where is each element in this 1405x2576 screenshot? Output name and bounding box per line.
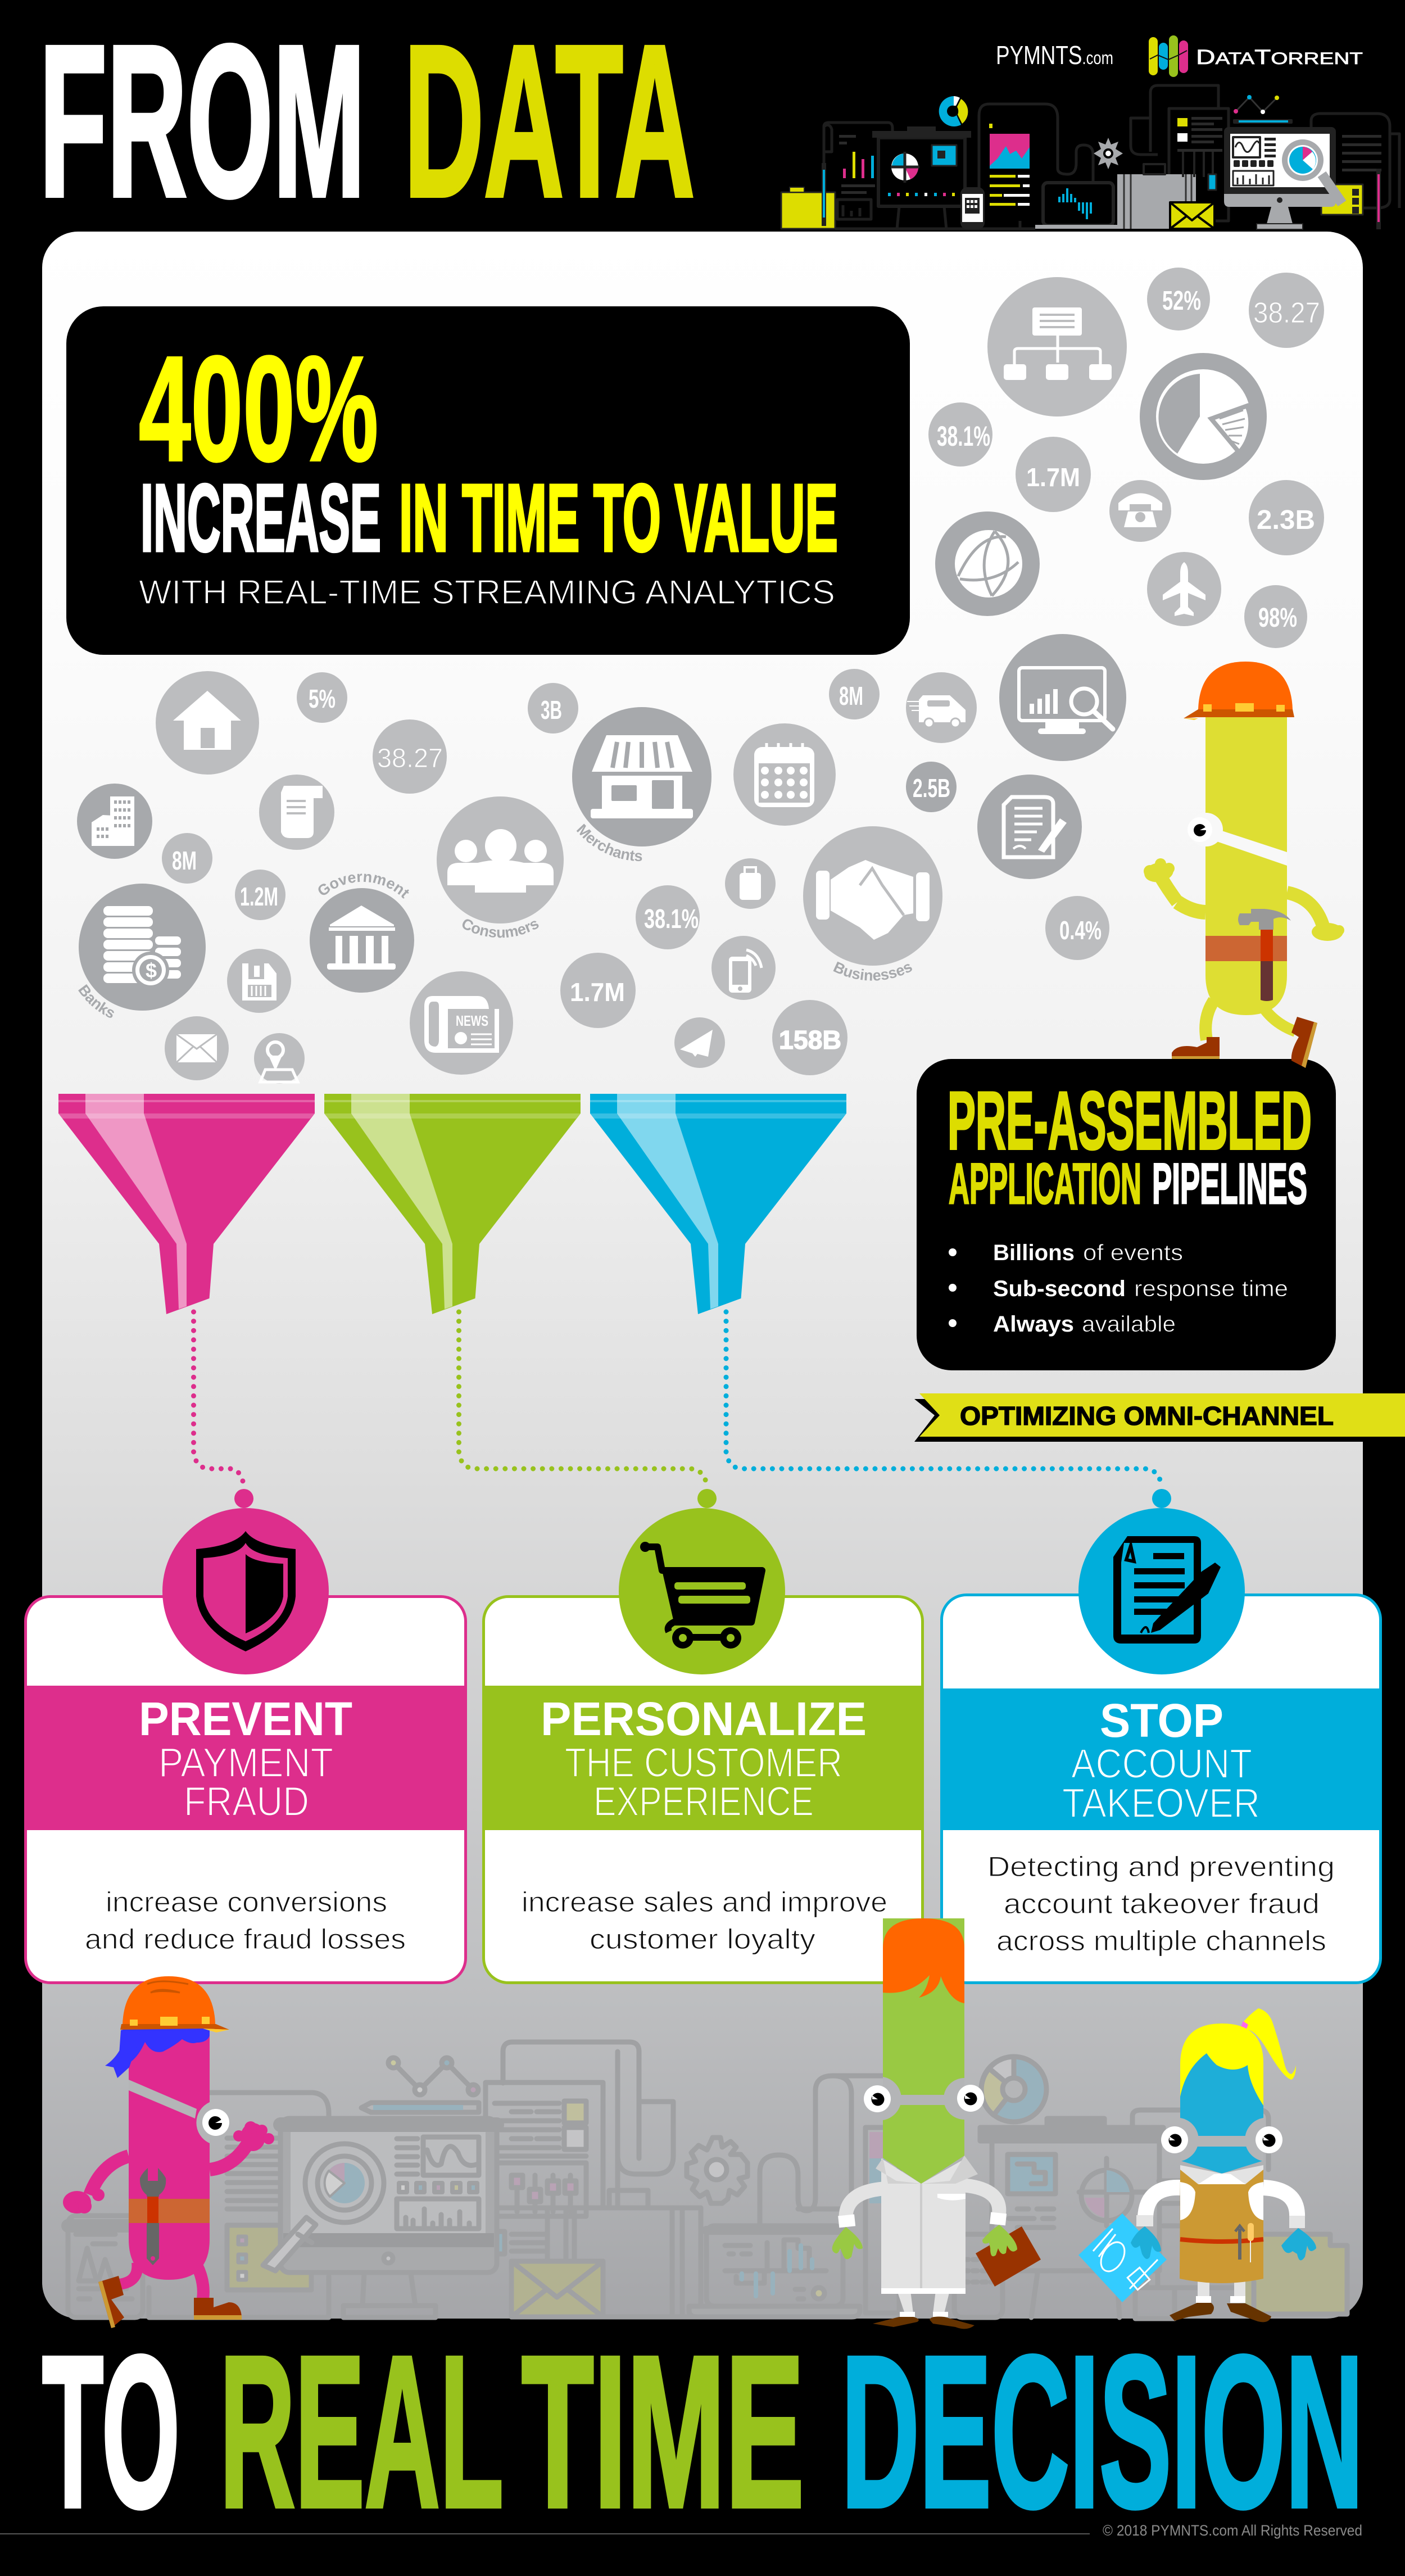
subheading: payment fraud: PAYMENT — [158, 1740, 333, 1786]
panel: pre-assembled application pipelines — [917, 1059, 1336, 1370]
bubble: banks coins — [79, 884, 206, 1011]
bubble: office buildings — [77, 784, 152, 859]
subheading: WITH REAL-TIME STREAMING ANALYTICS — [139, 573, 835, 611]
body text — [522, 1886, 887, 1955]
bubble: 98% — [1244, 585, 1307, 648]
body text: Detecting and preventing — [987, 1851, 1335, 1882]
bubble: 3B — [528, 683, 578, 734]
ribbon: optimizing omni-channel: OPTIMIZING OMNI-CHANNEL — [960, 1401, 1334, 1430]
bullet list: Billions — [993, 1241, 1075, 1265]
bubble: 3B: 3B — [541, 695, 562, 725]
bubble: 38.1% — [928, 402, 992, 467]
bubble: house — [156, 671, 259, 775]
label: Banks: Banks — [78, 984, 114, 1018]
title: to real time decision — [42, 2311, 1363, 2552]
subheading: payment fraud — [158, 1740, 333, 1825]
bubble: 8M — [162, 833, 212, 884]
bubble: 0.4% — [1045, 896, 1109, 960]
bubble: 158B: 158B — [779, 1025, 841, 1054]
bubble: 38.1% — [636, 885, 700, 949]
heading: personalize: PERSONALIZE — [541, 1692, 867, 1745]
bubble: 8M: 8M — [172, 846, 197, 875]
title: to real time decision: REAL — [220, 2311, 504, 2552]
logo: DataTorrent — [1149, 35, 1363, 77]
logo: DataTorrent: D ATA TORRENT — [1196, 46, 1363, 69]
connector: pink dotted line — [193, 1312, 253, 1508]
subheading: the customer experience: EXPERIENCE — [593, 1779, 814, 1825]
label: Merchants: Merchants — [577, 824, 642, 861]
bullet list — [949, 1241, 1288, 1337]
bubble: 8M — [829, 669, 880, 719]
card: stop account takeover — [942, 1595, 1380, 1983]
bubble cloud: data sources — [77, 268, 1324, 1084]
subheading: the customer experience — [565, 1740, 842, 1825]
bubble: airplane — [1147, 552, 1221, 626]
body text: account takeover fraud — [1004, 1888, 1320, 1919]
bullet list: of events — [1083, 1241, 1183, 1265]
bubble: signed document — [977, 775, 1082, 879]
header illustration: office equipment scene — [781, 85, 1399, 229]
bubble: van — [906, 672, 977, 743]
character: pink worker with wrench — [63, 1976, 274, 2328]
bubble: handshake — [803, 826, 942, 966]
bubble: 158B — [772, 1000, 847, 1075]
heading: increase in time to value: IN TIME TO VALUE — [399, 465, 838, 572]
title: FROM DATA: FROM — [39, 1, 365, 242]
subheading: account takeover: ACCOUNT — [1071, 1741, 1252, 1787]
label: Consumers: Consumers — [462, 919, 538, 938]
bullet list: Sub-second — [993, 1276, 1126, 1301]
logo: PYMNTS.com: PYMNTS.com — [996, 40, 1113, 70]
background illustration: grey office scene — [68, 2042, 1347, 2319]
bubble: map pin — [254, 1033, 305, 1084]
body text: and reduce fraud losses — [85, 1923, 406, 1955]
bubble: 2.5B — [906, 762, 957, 812]
bubble: smartphone — [711, 936, 776, 1000]
bubble: 1.2M — [235, 870, 285, 920]
bubble: 38.1%: 38.1% — [644, 904, 699, 934]
bubble: consumers — [437, 796, 564, 923]
bubble: 52%: 52% — [1162, 286, 1201, 316]
main panel — [42, 232, 1363, 2319]
heading: application pipelines: APPLICATION — [949, 1152, 1141, 1216]
bubble: floppy disk — [227, 949, 291, 1013]
bubble: 2.3B: 2.3B — [1257, 505, 1315, 535]
subheading: account takeover: TAKEOVER — [1062, 1781, 1260, 1826]
funnel: blue — [590, 1094, 846, 1314]
title: to real time decision: TIME — [522, 2311, 804, 2552]
bubble: org chart — [987, 277, 1127, 416]
character: yellow worker with hammer — [1143, 662, 1344, 1068]
bubble: 38.27: 38.27 — [1253, 297, 1320, 329]
bubble: suitcase — [725, 858, 776, 909]
card: prevent payment fraud — [26, 1596, 465, 1983]
bullet list: Always — [993, 1312, 1074, 1337]
bubble: 98%: 98% — [1258, 603, 1297, 633]
stat: 400%: 400% — [139, 325, 378, 492]
panel: 400% headline box — [66, 306, 910, 655]
label: Government: Government — [318, 873, 409, 899]
bullet list: response time — [1134, 1276, 1288, 1301]
bubble: government building — [310, 888, 414, 993]
body text — [85, 1886, 406, 1955]
bubble: 2.3B — [1249, 480, 1324, 555]
title: to real time decision: TO — [42, 2311, 180, 2552]
card: personalize the customer experience — [483, 1596, 923, 1983]
body text: customer loyalty — [590, 1923, 815, 1955]
body text: increase sales and improve — [522, 1886, 887, 1918]
bubble: 1.7M: 1.7M — [570, 977, 625, 1007]
bubble: calendar — [733, 723, 836, 826]
character: green scientist in lab coat — [832, 1918, 1041, 2329]
bubble: 0.4%: 0.4% — [1059, 916, 1102, 945]
bubble: 38.27 — [373, 719, 447, 794]
bubble: telephone — [1109, 480, 1171, 542]
bubble: 1.7M — [1016, 437, 1091, 512]
bubble: 8M: 8M — [839, 681, 863, 710]
bubble: 1.2M: 1.2M — [240, 882, 278, 911]
character: blue woman in apron — [1078, 2008, 1316, 2322]
connector: blue dotted line — [726, 1312, 1171, 1508]
title: FROM DATA: DATA — [404, 1, 695, 242]
bubble: 1.7M: 1.7M — [1026, 463, 1080, 492]
icon: shield — [162, 1508, 329, 1674]
bubble: analytics monitor — [999, 634, 1126, 761]
heading: increase in time to value: INCREASE — [140, 465, 381, 572]
footer rule — [0, 2533, 1090, 2534]
copyright: © 2018 PYMNTS.com All Rights Reserved — [1103, 2522, 1362, 2539]
bubble: merchants store — [572, 707, 711, 846]
body text — [987, 1851, 1335, 1957]
bubble: newspaper: NEWS — [456, 1012, 488, 1029]
heading: stop: STOP — [1100, 1694, 1223, 1747]
body text: increase conversions — [106, 1886, 387, 1918]
background illustration: grey monitor — [263, 2118, 497, 2317]
bubble: receipt scroll — [259, 775, 334, 850]
body text: across multiple channels — [996, 1925, 1326, 1957]
bubble: envelope — [165, 1016, 229, 1080]
bubble: 5% — [297, 672, 347, 723]
bubble: paper plane — [674, 1017, 725, 1068]
subheading: the customer experience: THE CUSTOMER — [565, 1740, 842, 1786]
bullet list: available — [1082, 1312, 1176, 1337]
connector: green dotted line — [459, 1312, 717, 1508]
subheading: payment fraud: FRAUD — [184, 1779, 309, 1825]
label: Businesses: Businesses — [833, 961, 912, 981]
bubble: 2.5B: 2.5B — [913, 773, 950, 803]
bubble: 5%: 5% — [309, 684, 336, 713]
bubble: 38.27: 38.27 — [377, 744, 443, 773]
subheading: account takeover — [1062, 1741, 1260, 1826]
bubble: globe — [935, 511, 1040, 616]
funnel: pink — [58, 1094, 315, 1314]
heading: prevent: PREVENT — [139, 1692, 352, 1745]
bubble: 52% — [1147, 268, 1210, 331]
bubble: 38.27 — [1249, 273, 1324, 348]
bubble: banks coins: $ — [146, 959, 157, 982]
icon: signed document — [1078, 1508, 1245, 1674]
ribbon: optimizing omni-channel — [914, 1393, 1405, 1442]
bubble: pie chart — [1140, 353, 1267, 480]
bubble: 1.7M — [560, 953, 636, 1028]
icon: shopping cart — [619, 1508, 785, 1674]
bubble: newspaper — [410, 971, 513, 1075]
funnel: green — [324, 1094, 581, 1314]
bubble: 38.1%: 38.1% — [937, 420, 990, 452]
